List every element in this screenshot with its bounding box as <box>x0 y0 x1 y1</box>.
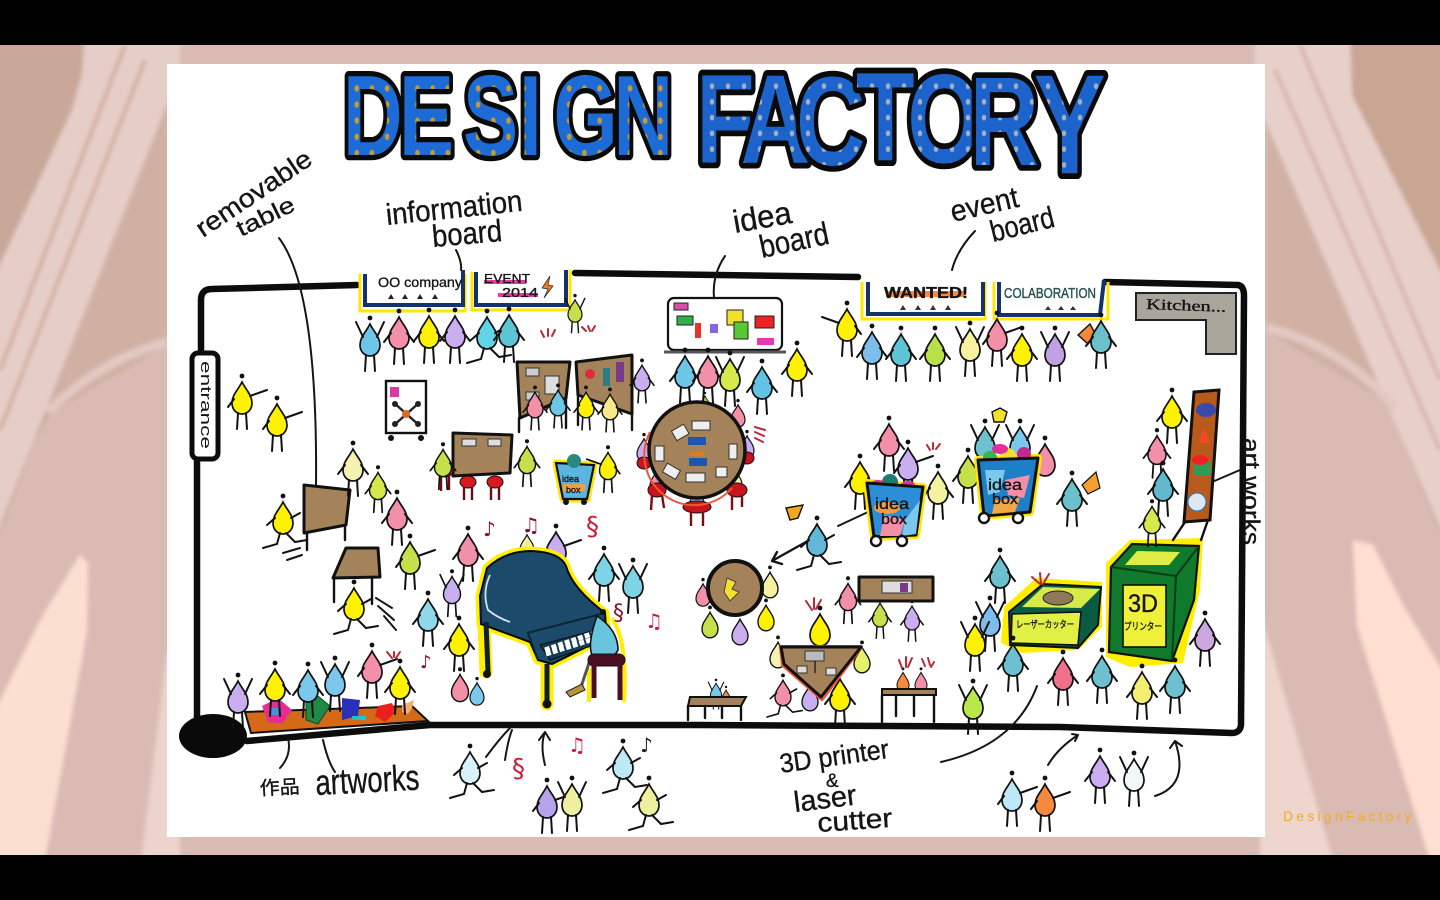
people at artworks <box>224 643 415 728</box>
triangular table <box>781 647 861 699</box>
music notes: § <box>512 754 525 784</box>
event boards: COLABORATION <box>1004 285 1096 302</box>
music notes: ♪ <box>420 652 432 673</box>
crowd at idea board <box>670 341 812 414</box>
idea box right <box>978 444 1038 523</box>
floor plan walls <box>179 273 1244 758</box>
handwritten labels: & <box>826 771 839 792</box>
tan table with red stools <box>437 433 512 500</box>
black bar top <box>0 0 1440 45</box>
crowd around partition panels <box>523 358 654 432</box>
laser cutter <box>1001 578 1102 653</box>
handwritten labels: board <box>756 215 832 265</box>
people around small tables <box>696 565 923 726</box>
handwritten labels: board <box>431 213 503 254</box>
music notes: ♪ <box>640 733 653 757</box>
3D printer: 3D <box>1128 590 1158 618</box>
mobile partition panels <box>517 355 632 432</box>
idea board <box>664 298 786 352</box>
laser cutter: レーザーカッター <box>1016 619 1074 631</box>
title: DESIGN <box>343 53 673 180</box>
artworks table <box>245 696 428 733</box>
3D printer <box>1106 538 1203 667</box>
handwritten labels: information <box>384 185 524 232</box>
3D printer: プリンター <box>1124 621 1162 633</box>
information boards: EVENT <box>484 271 530 286</box>
handwritten labels: cutter <box>816 803 893 838</box>
entrance door: entrance <box>197 361 214 449</box>
crowd at information board <box>356 294 585 371</box>
information boards <box>360 270 570 311</box>
crowd behind piano <box>520 524 581 579</box>
small idea box <box>556 454 594 505</box>
red stools around round table <box>637 452 754 526</box>
title: FACTORY <box>696 45 1106 204</box>
handwritten labels: artworks <box>314 757 420 803</box>
music notes: ♫ <box>522 513 540 537</box>
low desk left <box>688 679 746 720</box>
white drawing sheet <box>167 64 1265 837</box>
people around piano <box>413 526 647 705</box>
person with idea note and arrow <box>786 505 841 570</box>
people at round table <box>637 392 754 511</box>
information boards: OO company <box>378 274 462 290</box>
people around tan table <box>430 439 620 492</box>
people at entrance <box>228 374 302 451</box>
music notes: ♫ <box>568 733 586 757</box>
information boards: 2014 <box>502 285 538 300</box>
handwritten labels: event <box>947 181 1022 229</box>
handwritten labels: art works <box>1237 438 1264 545</box>
title <box>343 45 1106 204</box>
rectangular table <box>859 577 933 601</box>
small round table <box>708 561 762 615</box>
music notes: ♫ <box>645 609 663 633</box>
low desk right <box>882 667 936 722</box>
people outside bottom left <box>450 739 673 833</box>
footer brand text: DesignFactory <box>1283 808 1415 824</box>
music notes: § <box>613 601 624 626</box>
idea box middle: idea <box>875 496 909 513</box>
people around printers <box>959 548 1220 734</box>
handwritten labels: 3D printer <box>778 734 891 779</box>
removable table pushed <box>283 485 350 560</box>
excitement marks <box>387 326 1049 668</box>
handwritten labels: idea <box>730 194 795 240</box>
music notes: § <box>586 512 599 542</box>
music notes: ♪ <box>483 517 496 541</box>
people around idea boxes <box>845 408 1100 526</box>
art panel <box>1173 390 1219 540</box>
black bar bottom <box>0 855 1440 900</box>
people moving tables <box>263 441 435 634</box>
handwritten labels: board <box>987 201 1058 249</box>
entrance door <box>192 353 218 459</box>
idea box middle <box>867 474 923 546</box>
handwritten labels: 作品 <box>259 776 300 800</box>
crowd at event board <box>822 301 1116 381</box>
event boards: WANTED! <box>884 285 968 302</box>
kitchen: Kitchen... <box>1146 297 1226 316</box>
kitchen <box>1136 293 1236 354</box>
music notes <box>420 512 663 784</box>
handwritten labels <box>190 143 1264 838</box>
small idea box: idea <box>562 474 579 484</box>
removable table carried <box>333 548 396 630</box>
handwritten labels: table <box>232 191 299 241</box>
whiteboard mind map <box>386 381 426 441</box>
label leader lines and arrows <box>279 231 1240 796</box>
handwritten labels: removable <box>190 143 317 243</box>
idea box middle: box <box>881 511 908 528</box>
idea box right: box <box>992 491 1019 508</box>
grand piano <box>480 551 625 708</box>
large round table <box>644 402 745 505</box>
pianist on stool <box>566 609 625 700</box>
people outside bottom right <box>998 748 1148 831</box>
idea box right: idea <box>988 477 1022 494</box>
small idea box: box <box>566 485 581 495</box>
people at art panel <box>1139 388 1187 546</box>
event boards <box>862 280 1108 319</box>
handwritten labels: laser <box>792 779 859 819</box>
